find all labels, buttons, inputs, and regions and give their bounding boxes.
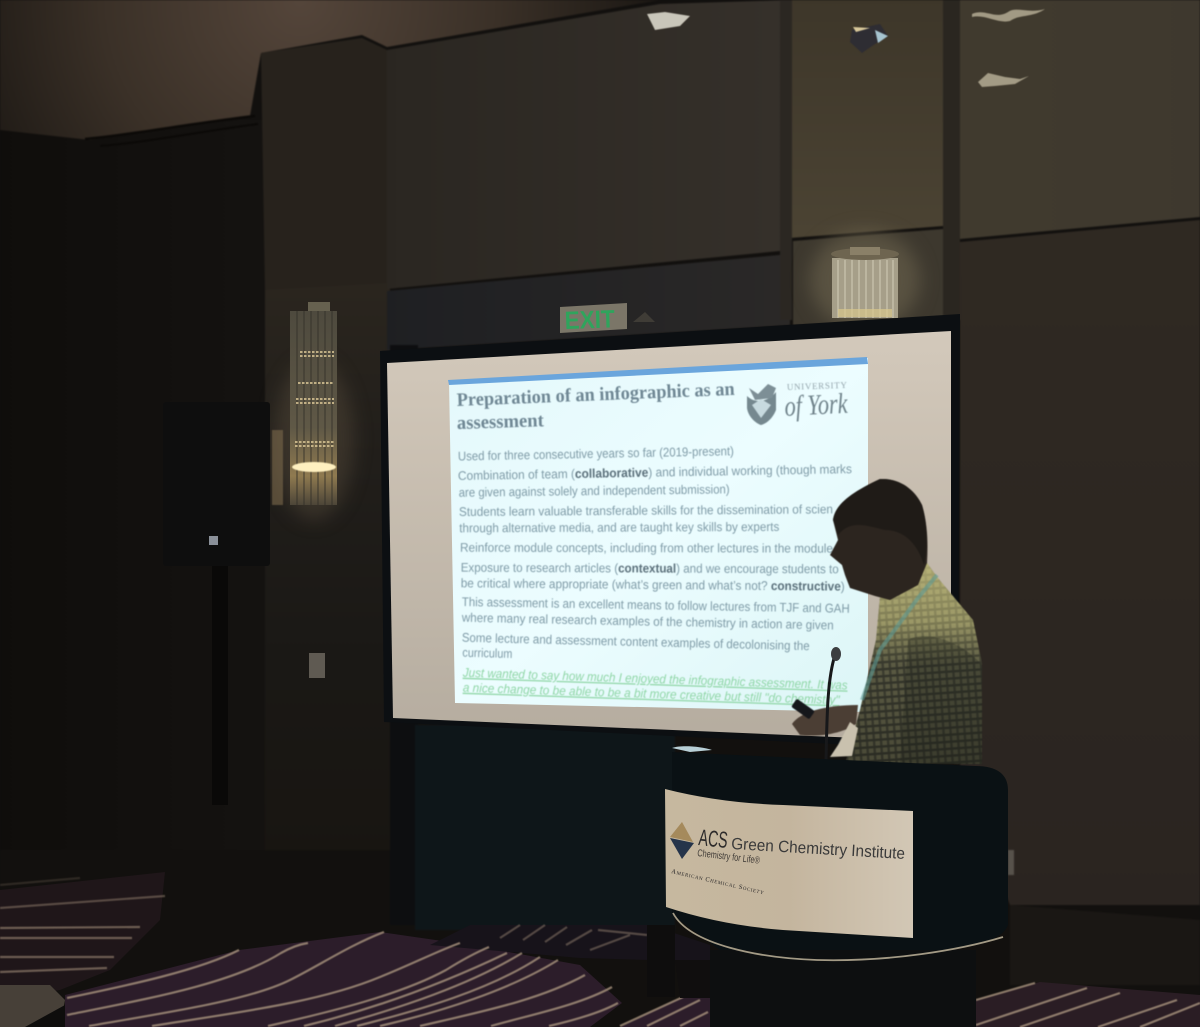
University of York logo: [747, 380, 849, 425]
slide title: Preparation of an infographic as an: [456, 379, 735, 411]
metal ring: [673, 913, 1003, 960]
student quote in green: a nice change to be able to be a bit more creative but still "do chemistry": [463, 681, 840, 707]
exit sign: [560, 303, 655, 335]
slide bullet text: through alternative media, and are taught key skills by experts: [459, 520, 779, 535]
ACS Green Chemistry Institute sign: Chemistry for Life®: [697, 848, 761, 867]
slide bullet text: Exposure to research articles (contextual) and we encourage students to: [461, 561, 839, 576]
ACS logo: [670, 822, 694, 859]
slide bullet text: This assessment is an excellent means to follow lectures from TJF and GAH: [462, 595, 850, 616]
slide bullet text: curriculum: [462, 646, 513, 661]
arm and hand: [792, 705, 858, 736]
University of York logo: of York: [784, 388, 849, 423]
wall lamp left: [272, 302, 354, 520]
ACS Green Chemistry Institute sign: [665, 789, 913, 938]
University of York logo: UNIVERSITY: [787, 380, 848, 392]
ACS Green Chemistry Institute sign: Green Chemistry Institute: [731, 835, 906, 863]
microphone: [826, 647, 841, 760]
lectern: [647, 746, 1008, 1027]
slide bullet text: Combination of team (collaborative) and individual working (though marks: [458, 462, 852, 483]
shirt: [846, 563, 982, 764]
lanyard: [862, 575, 937, 700]
head: [830, 479, 927, 600]
speaker on a pole: [163, 402, 270, 805]
slide bullet text: [458, 444, 852, 661]
slide bullet text: where many real research examples of the chemistry in action are given: [461, 611, 834, 632]
slide bullet text: Students learn valuable transferable skills for the dissemination of scien: [459, 502, 833, 519]
exit sign: EXIT: [564, 305, 615, 335]
slide bullet text: Some lecture and assessment content examples of decolonising the: [462, 631, 810, 653]
ACS Green Chemistry Institute sign: American Chemical Society: [671, 868, 765, 896]
carpet: [0, 872, 1200, 1027]
slide: [448, 357, 868, 712]
student quote in green: Just wanted to say how much I enjoyed the infographic assessment. It was: [462, 666, 848, 692]
presenter: [791, 479, 990, 770]
crest: [747, 384, 776, 425]
wall lamp right: [810, 230, 920, 330]
slide bullet text: are given against solely and independent submission): [459, 482, 730, 500]
slide title: [456, 379, 735, 434]
projection screen: [380, 314, 960, 750]
carpet stripes: [0, 878, 1200, 1027]
slide title: assessment: [456, 410, 545, 434]
light switch: [309, 653, 325, 678]
slide bullet text: Reinforce module concepts, including from other lectures in the module: [460, 541, 833, 556]
student quote in green: [462, 666, 848, 707]
slide bullet text: be critical where appropriate (what’s green and what’s not? constructive): [461, 576, 845, 594]
name badge: [830, 722, 858, 757]
hanging ceiling ornaments: [647, 9, 1045, 87]
slide bullet text: Used for three consecutive years so far (2019-present): [458, 444, 734, 463]
presenter remote: [791, 699, 815, 719]
ACS Green Chemistry Institute sign: ACS: [697, 824, 729, 853]
